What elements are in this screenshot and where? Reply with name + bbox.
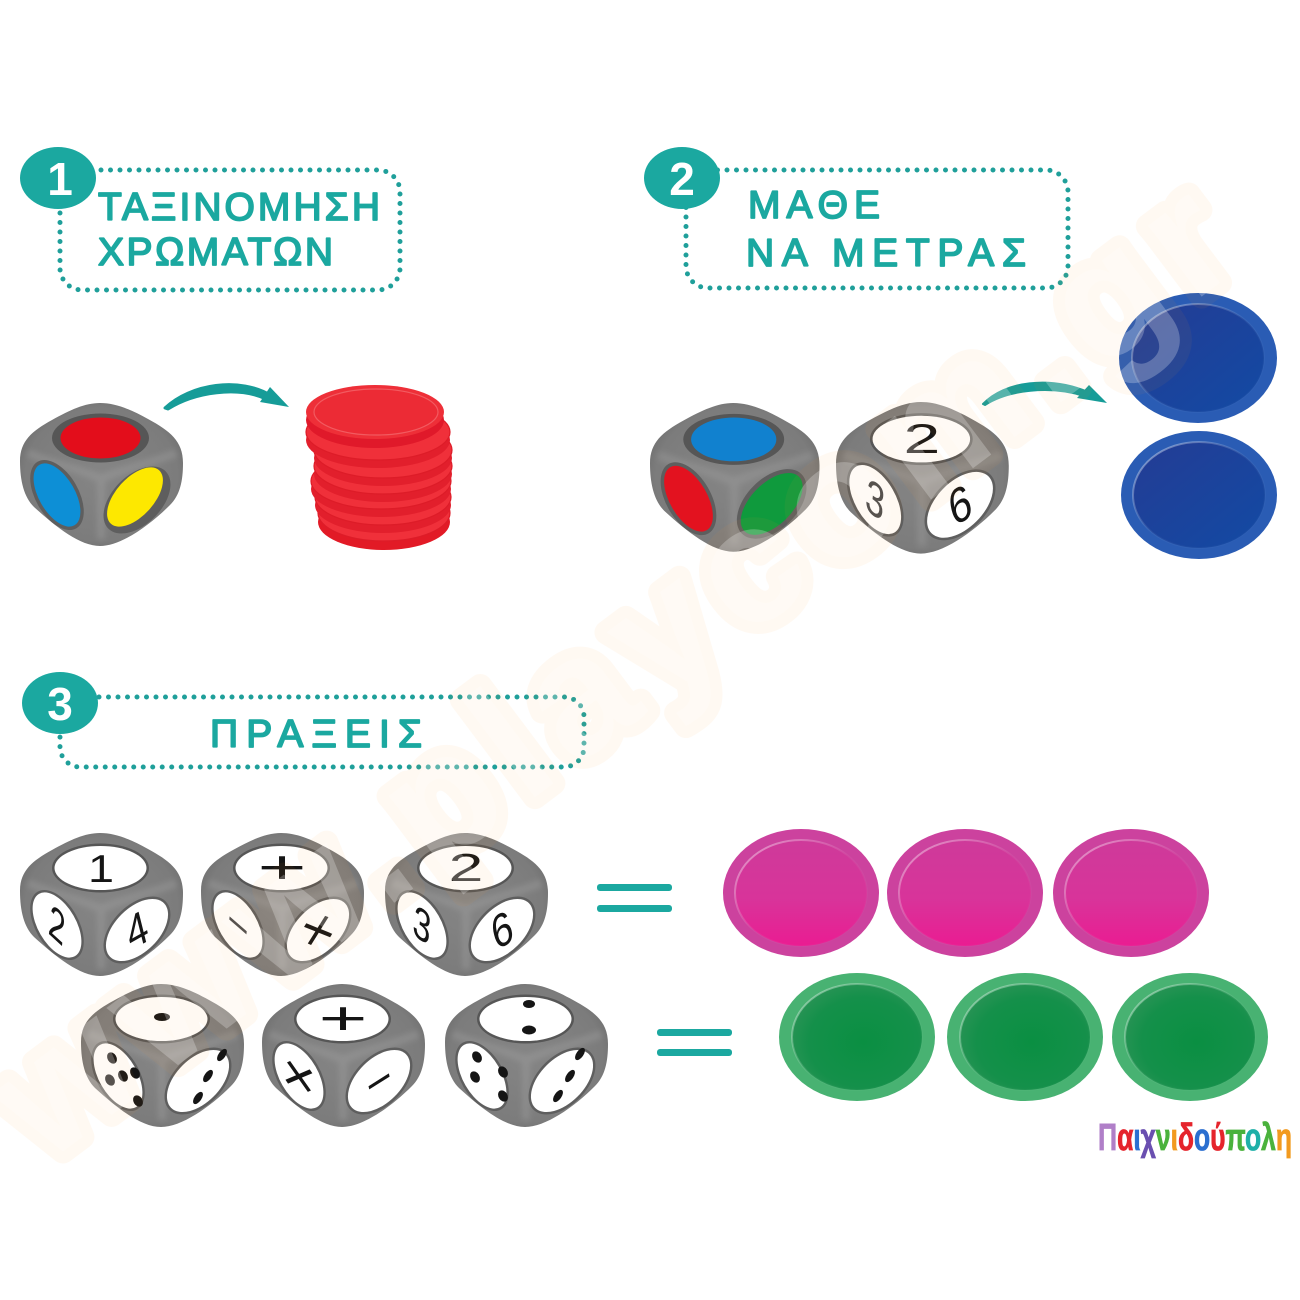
red chip stack [306, 385, 452, 550]
icon: operator die + - x: × [296, 897, 340, 964]
icon: colour die, step 2 [649, 403, 820, 552]
icon: number die, step 2: 3 [863, 468, 887, 533]
icon: number die 1-2-4 [19, 833, 183, 976]
dotted frame 3 [60, 697, 584, 767]
green chip 2 [947, 973, 1103, 1101]
icon: dot die 2-4-3 [444, 984, 608, 1127]
icon: operator die + x -: − [361, 1049, 398, 1114]
icon: colour die, step 1 [19, 403, 183, 546]
green chips [779, 973, 1268, 1101]
icon: number die, step 2 [835, 402, 1009, 554]
icon: dot die 1-5-3 [80, 984, 244, 1127]
pink chip 2 [887, 829, 1043, 957]
icon: number die, step 2: 2 [903, 415, 940, 462]
icon: number die 2-3-6: 3 [411, 894, 433, 956]
heading text 2: ΜΑΘΕ [748, 184, 880, 227]
number badge 1: 1 [47, 153, 73, 205]
panel: step 2 heading [644, 147, 1068, 288]
equals sign row 2 [657, 1029, 732, 1056]
logo: Παιχνιδούπολη [1098, 1117, 1292, 1159]
green chip 1 [779, 973, 935, 1101]
heading text 1 [98, 186, 380, 274]
icon: number die 1-2-4: 2 [47, 893, 67, 957]
icon: operator die + x - [261, 984, 425, 1127]
arrow: die to red stack [165, 385, 289, 409]
icon: operator die + - x: − [225, 891, 251, 959]
icon: operator die + - x [200, 833, 364, 976]
dotted frame 1 [60, 170, 400, 290]
icon: number die 2-3-6 [384, 833, 548, 976]
panel: step 1 heading [20, 147, 400, 290]
number badge 2: 2 [669, 153, 695, 205]
icon: number die 1-2-4: 1 [88, 848, 114, 891]
heading text 2 [746, 184, 1026, 275]
pink chips [723, 829, 1209, 957]
equals sign row 1 [597, 884, 672, 912]
number badge 3 [22, 672, 98, 734]
green chip 3 [1112, 973, 1268, 1101]
blue chip bottom [1121, 431, 1277, 559]
dotted frame 2 [686, 170, 1068, 288]
heading text 3: ΠΡΑΞΕΙΣ [210, 713, 422, 756]
icon: operator die + x -: + [319, 993, 367, 1044]
number badge 1 [20, 147, 96, 209]
heading text 1: ΤΑΞΙΝΟΜΗΣΗ [98, 186, 380, 229]
icon: operator die + x -: × [280, 1042, 318, 1112]
number badge 3: 3 [47, 678, 73, 730]
blue chip top [1119, 293, 1277, 423]
blue chips [1119, 293, 1277, 559]
icon: operator die + - x: + [258, 842, 306, 893]
number badge 2 [644, 147, 720, 209]
pink chip 3 [1053, 829, 1209, 957]
icon: number die 2-3-6: 6 [486, 901, 518, 961]
heading text 1: ΧΡΩΜΑΤΩΝ [98, 231, 333, 274]
icon: number die 2-3-6: 2 [449, 847, 483, 890]
icon: number die 1-2-4: 4 [121, 901, 153, 961]
pink chip 1 [723, 829, 879, 957]
heading text 2: ΝΑ ΜΕΤΡΑΣ [746, 232, 1026, 275]
icon: number die, step 2: 6 [943, 473, 977, 537]
panel: step 3 heading [22, 672, 584, 767]
arrow: dice to blue chips [983, 383, 1107, 405]
